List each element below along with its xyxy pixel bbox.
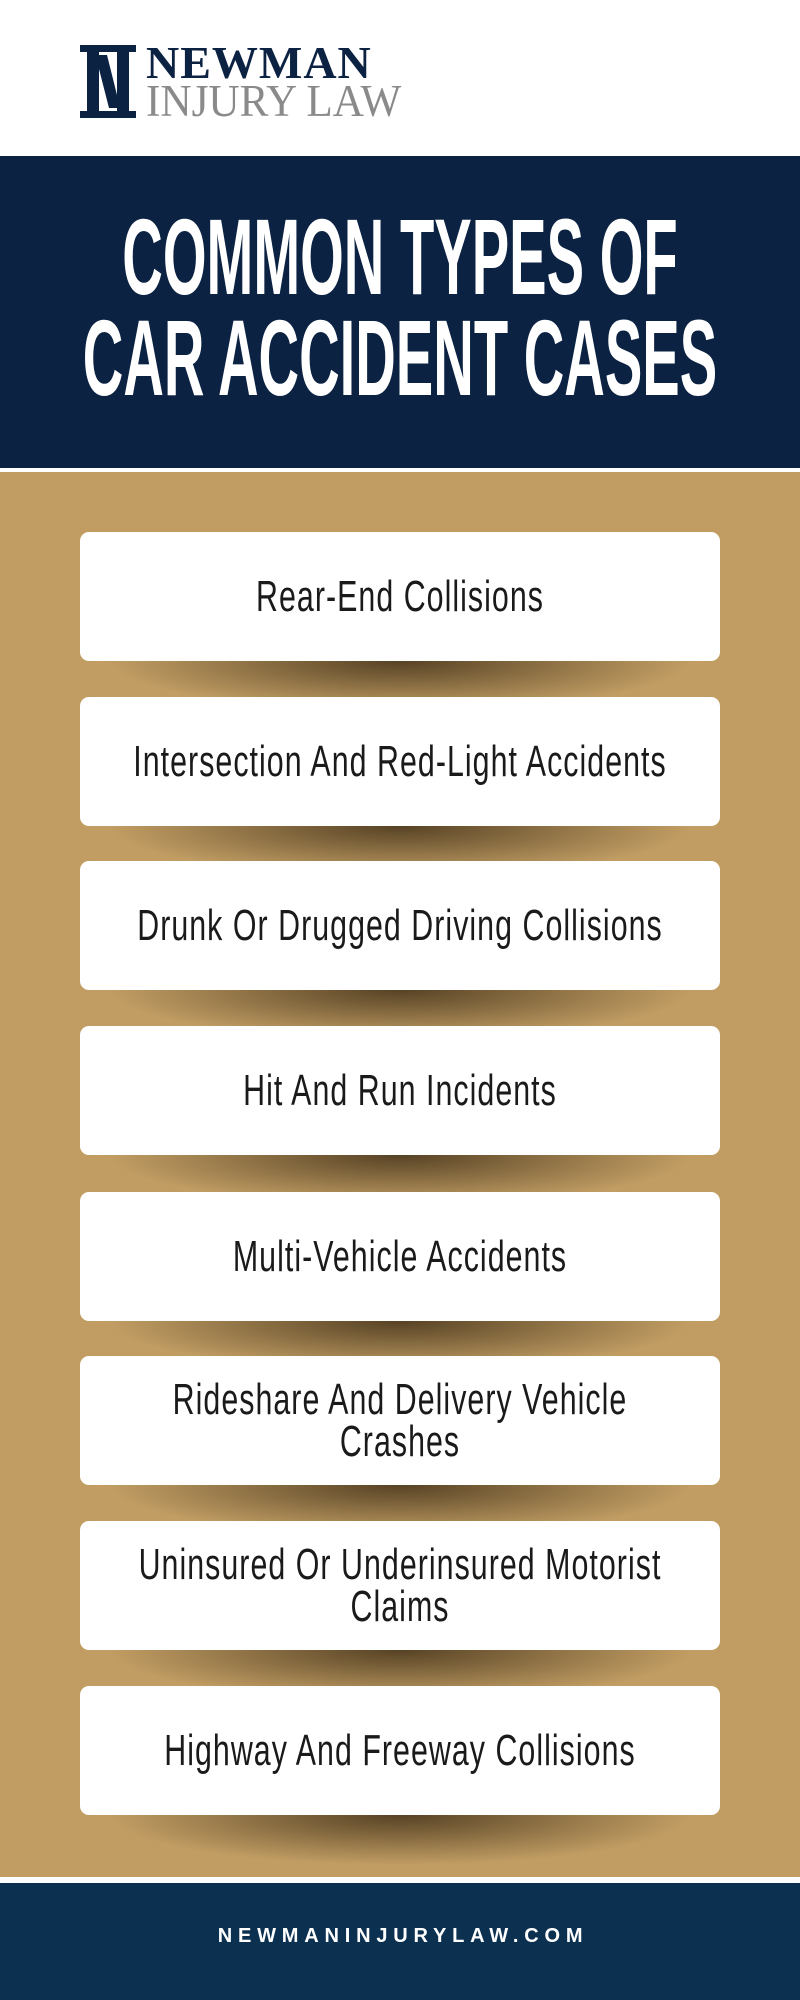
card 4: Hit And Run Incidents	[243, 1066, 557, 1114]
card 1: Rear-End Collisions	[256, 572, 544, 620]
card 6: Crashes	[340, 1416, 460, 1466]
card 3	[80, 861, 720, 990]
title	[83, 196, 717, 418]
logo: INJURY LAW	[146, 76, 401, 126]
card 1	[80, 532, 720, 661]
card 7: Uninsured Or Underinsured Motorist	[139, 1540, 661, 1588]
card 8: Highway And Freeway Collisions	[164, 1726, 636, 1774]
logo	[80, 37, 402, 126]
brand name: NEWMAN	[146, 37, 372, 88]
card 4	[80, 1026, 720, 1155]
panel: list	[0, 472, 800, 1877]
card 2	[80, 697, 720, 826]
card 6: Rideshare And Delivery Vehicle	[173, 1374, 627, 1424]
card 5: Multi-Vehicle Accidents	[233, 1232, 567, 1280]
card 3: Drunk Or Drugged Driving Collisions	[137, 900, 663, 950]
icon: pillar N	[80, 45, 136, 118]
title: CAR ACCIDENT CASES	[83, 297, 717, 418]
card 8	[80, 1686, 720, 1815]
card 5	[80, 1192, 720, 1321]
card 7	[80, 1521, 720, 1650]
header band	[0, 156, 800, 468]
footer url: NEWMANINJURYLAW.COM	[218, 1925, 588, 1947]
footer	[0, 1883, 800, 2000]
card 7: Claims	[351, 1582, 449, 1630]
title: COMMON TYPES OF	[122, 196, 678, 317]
card 6	[80, 1356, 720, 1485]
card 2: Intersection And Red-Light Accidents	[133, 736, 667, 786]
